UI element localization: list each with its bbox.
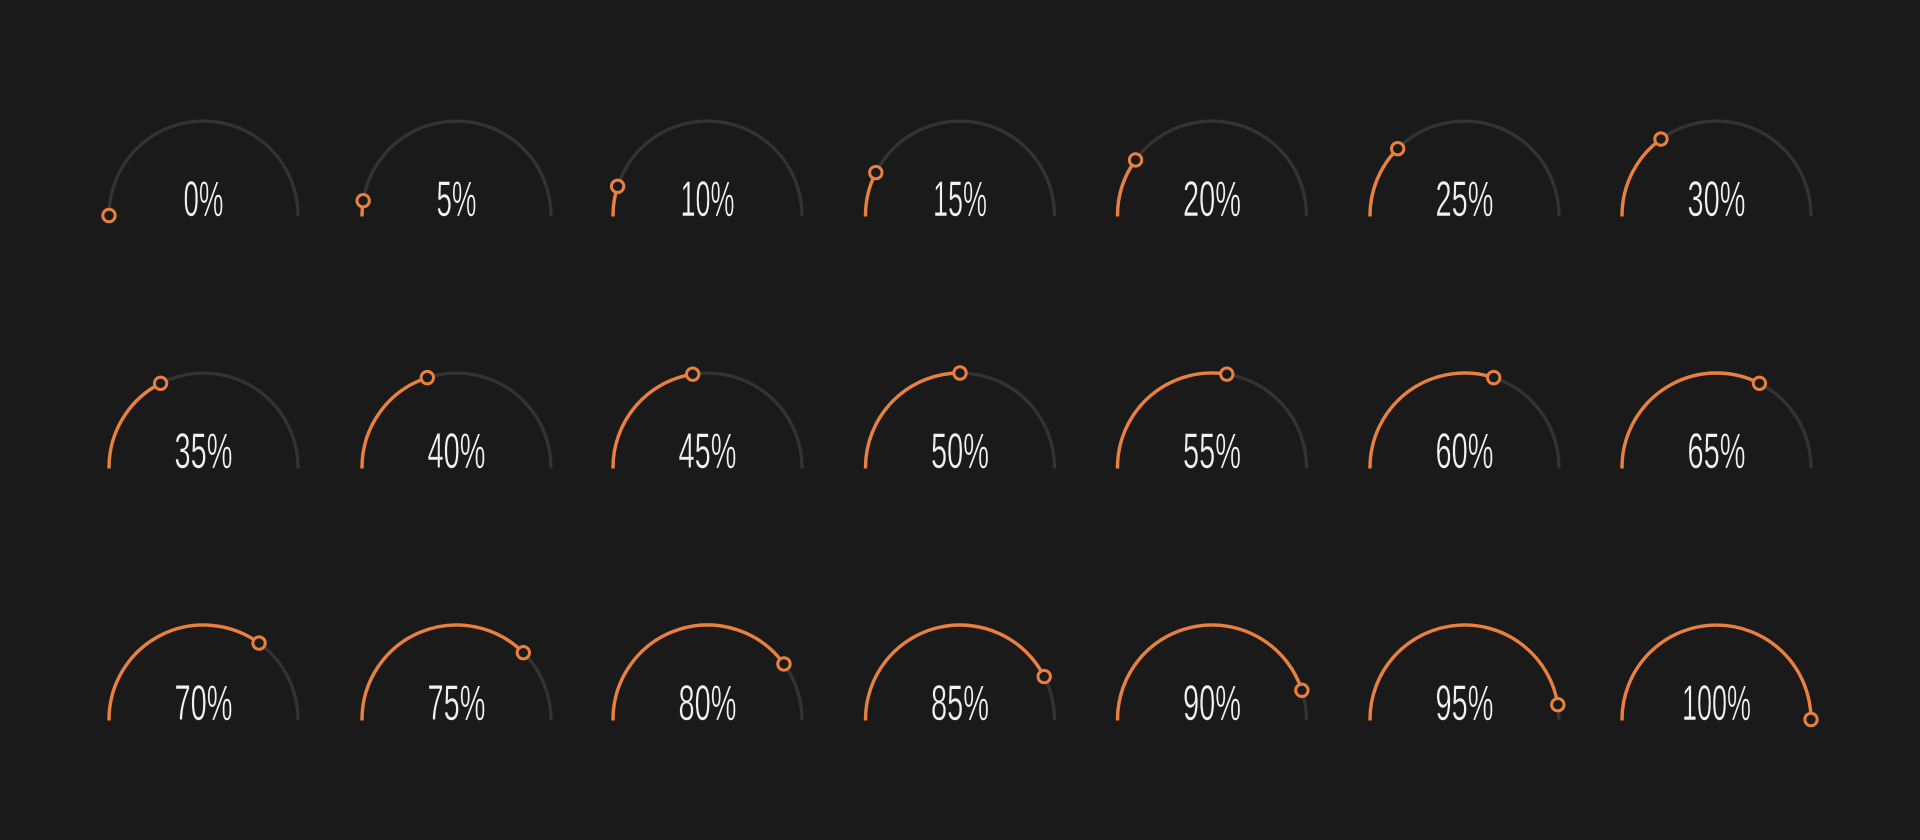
gauge: 15%	[866, 121, 1054, 227]
gauge: 45%: 45%	[678, 423, 736, 479]
gauge: 0%	[103, 121, 298, 227]
gauge: 5%: 5%	[436, 171, 476, 227]
gauge: 85%	[866, 625, 1054, 731]
gauge: 65%: 65%	[1688, 423, 1746, 479]
gauge: 85%: 85%	[931, 675, 989, 731]
gauge: 25%	[1370, 121, 1559, 227]
gauge: 30%	[1622, 121, 1811, 227]
gauge: 60%	[1370, 371, 1559, 479]
gauge: 60%: 60%	[1436, 423, 1494, 479]
gauge: 50%: 50%	[931, 423, 989, 479]
gauge: 55%	[1118, 368, 1306, 479]
gauge: 55%: 55%	[1183, 423, 1241, 479]
gauge: 100%: 100%	[1682, 675, 1751, 731]
gauge: 10%: 10%	[680, 171, 734, 227]
gauge: 80%: 80%	[678, 675, 736, 731]
gauge: 45%	[613, 368, 802, 479]
gauge: 35%	[109, 373, 298, 479]
gauge: 25%: 25%	[1436, 171, 1494, 227]
gauge: 10%	[611, 121, 802, 227]
gauge: 20%: 20%	[1183, 171, 1241, 227]
gauge: 95%: 95%	[1436, 675, 1494, 731]
gauge: 95%	[1370, 625, 1564, 731]
gauge: 30%: 30%	[1688, 171, 1746, 227]
gauge: 0%: 0%	[184, 171, 224, 227]
gauge: 40%	[362, 371, 551, 479]
gauge: 50%	[866, 367, 1054, 479]
gauge: 90%	[1118, 625, 1308, 731]
gauge: 35%: 35%	[174, 423, 232, 479]
gauge: 20%	[1118, 121, 1306, 227]
gauge: 5%	[357, 121, 551, 227]
gauge: 100%	[1622, 625, 1817, 731]
gauge: 70%: 70%	[174, 675, 232, 731]
gauge: 75%: 75%	[428, 675, 486, 731]
gauge: 75%	[362, 625, 551, 731]
gauge: 40%: 40%	[428, 423, 486, 479]
gauge: 80%	[613, 625, 802, 731]
gauge: 90%: 90%	[1183, 675, 1241, 731]
gauge: 15%: 15%	[933, 171, 987, 227]
gauge: 65%	[1622, 373, 1811, 479]
gauge: 70%	[109, 625, 298, 731]
